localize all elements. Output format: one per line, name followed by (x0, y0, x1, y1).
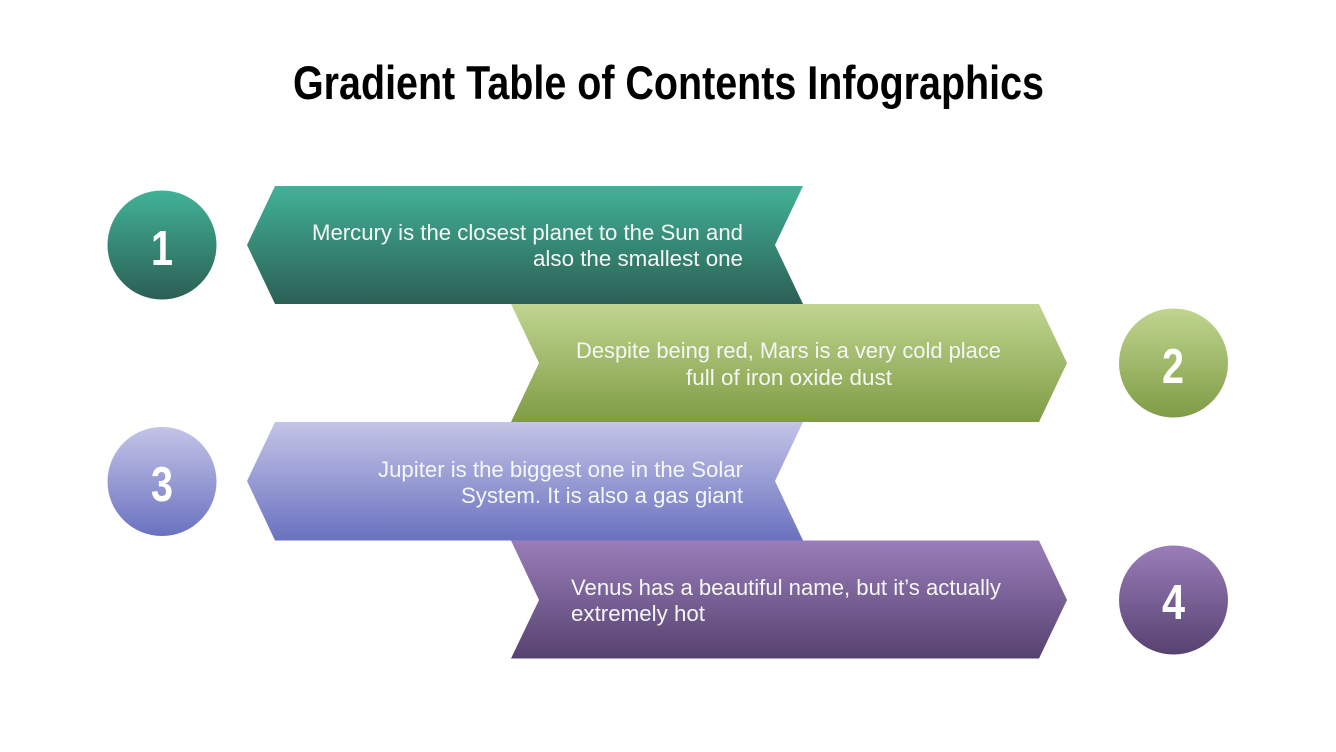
banner 3 (247, 422, 803, 540)
banner 4 (511, 540, 1067, 658)
title: Gradient Table of Contents Infographics (293, 56, 1044, 109)
item 2: Mars (511, 304, 1228, 422)
item 4: Venus (511, 540, 1228, 658)
number circle 4: 4 (1162, 576, 1185, 630)
text 3 (378, 457, 744, 508)
number circle 2: 2 (1162, 340, 1184, 394)
text 1: also the smallest one (533, 246, 743, 271)
text 1 (312, 220, 743, 271)
text 4 (571, 575, 1002, 626)
text 4: extremely hot (571, 601, 706, 626)
item 3: Jupiter (108, 422, 803, 540)
banner 2 (511, 304, 1067, 422)
text 4: Venus has a beautiful name, but it’s actually (571, 575, 1002, 600)
item 1: Mercury (108, 186, 803, 304)
number circle 2 (1119, 308, 1228, 418)
number circle 1 (108, 190, 216, 300)
text 2 (576, 338, 1001, 390)
number circle 1: 1 (151, 222, 173, 276)
number circle 3 (108, 427, 216, 536)
text 2: full of iron oxide dust (686, 365, 893, 390)
number circle 3: 3 (151, 458, 173, 512)
banner 1 (247, 186, 803, 304)
number circle 4 (1119, 546, 1228, 654)
text 3: System. It is also a gas giant (461, 483, 744, 508)
text 3: Jupiter is the biggest one in the Solar (378, 457, 743, 482)
text 1: Mercury is the closest planet to the Sun and (312, 220, 743, 245)
text 2: Despite being red, Mars is a very cold place (576, 338, 1001, 363)
